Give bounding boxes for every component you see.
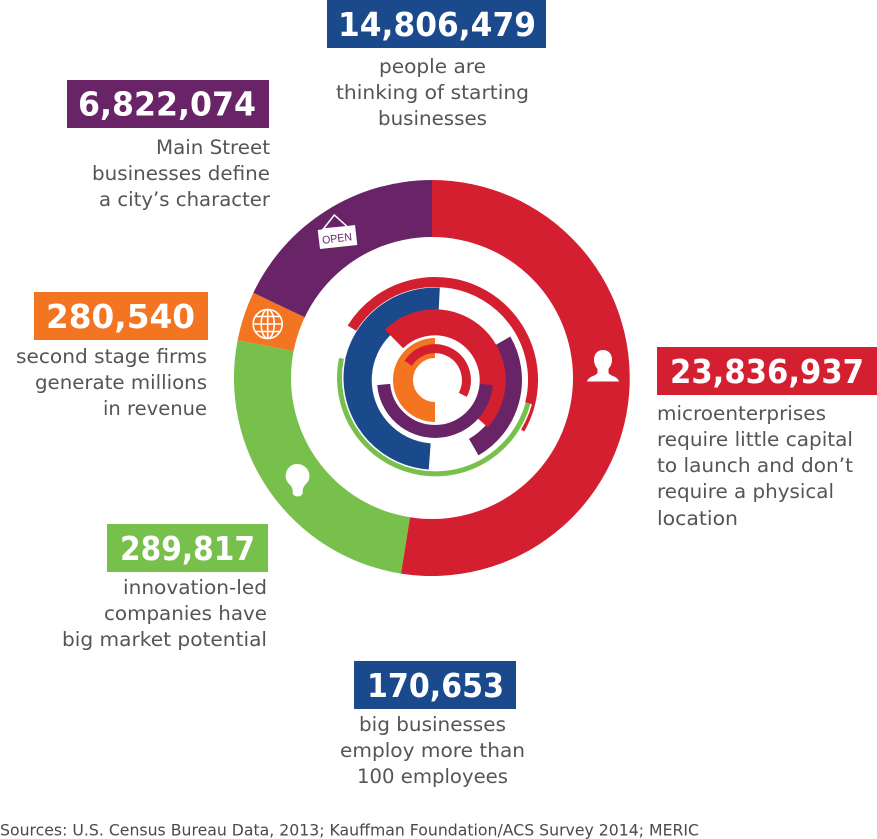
callout: 6,822,074 (67, 80, 271, 211)
description: second stage firms (16, 345, 207, 368)
description: employ more than (340, 739, 525, 762)
callout: 170,653 (340, 661, 525, 788)
concentric arcs chart (340, 282, 533, 474)
description: big businesses (359, 713, 506, 736)
callout: 289,817 (62, 524, 268, 651)
icon: globe (253, 310, 282, 338)
arc: small purple (384, 384, 486, 431)
description: people are (379, 55, 486, 78)
number badge: 14,806,479 (338, 5, 536, 44)
number badge: 280,540 (46, 297, 195, 336)
callout: 23,836,937 (657, 347, 877, 530)
number badge: 6,822,074 (78, 84, 256, 124)
callout: 14,806,479 (327, 0, 546, 130)
description (16, 345, 207, 420)
description: a city’s character (99, 188, 271, 211)
description (92, 136, 271, 211)
number badge: 23,836,937 (670, 352, 864, 391)
description: big market potential (62, 628, 267, 651)
description: generate millions (35, 371, 207, 394)
description: require little capital (657, 428, 853, 451)
description (62, 576, 267, 651)
description: to launch and don’t (657, 454, 853, 477)
description: 100 employees (357, 765, 508, 788)
description: businesses define (92, 162, 270, 185)
icon: light bulb (286, 464, 310, 496)
arc: large purple (474, 341, 512, 447)
segment: main street purple (253, 180, 432, 378)
description: innovation-led (123, 576, 267, 599)
description (657, 402, 853, 530)
segment: microenterprises red (401, 180, 630, 576)
description: location (657, 507, 738, 530)
arc: thick red (394, 322, 493, 419)
donut chart: outer ring (234, 180, 630, 576)
callout: 280,540 (16, 292, 208, 420)
description: businesses (378, 107, 487, 130)
icon: open sign: OPEN (322, 231, 353, 247)
ring hole (291, 237, 573, 519)
description: Main Street (156, 136, 270, 159)
segment: second stage orange (238, 293, 432, 378)
description: in revenue (103, 397, 207, 420)
number badge: 289,817 (120, 529, 255, 568)
arc: green thin with white edge (340, 358, 528, 474)
description (336, 55, 529, 130)
description: companies have (104, 602, 267, 625)
arc: orange (403, 348, 435, 412)
description: require a physical (657, 480, 834, 503)
segment: innovation-led green (234, 340, 432, 574)
number badge: 170,653 (367, 666, 504, 705)
description (340, 713, 525, 788)
sources footnote: Sources: U.S. Census Bureau Data, 2013; Kauffman Foundation/ACS Survey 2014; MERIC (0, 820, 699, 839)
icon: person (587, 350, 619, 382)
icon: open sign (318, 215, 357, 249)
description: thinking of starting (336, 81, 529, 104)
arc: inner thin red (408, 349, 466, 395)
arc: outer thin red (352, 282, 533, 429)
description: microenterprises (657, 402, 826, 425)
arc: blue (357, 302, 439, 458)
